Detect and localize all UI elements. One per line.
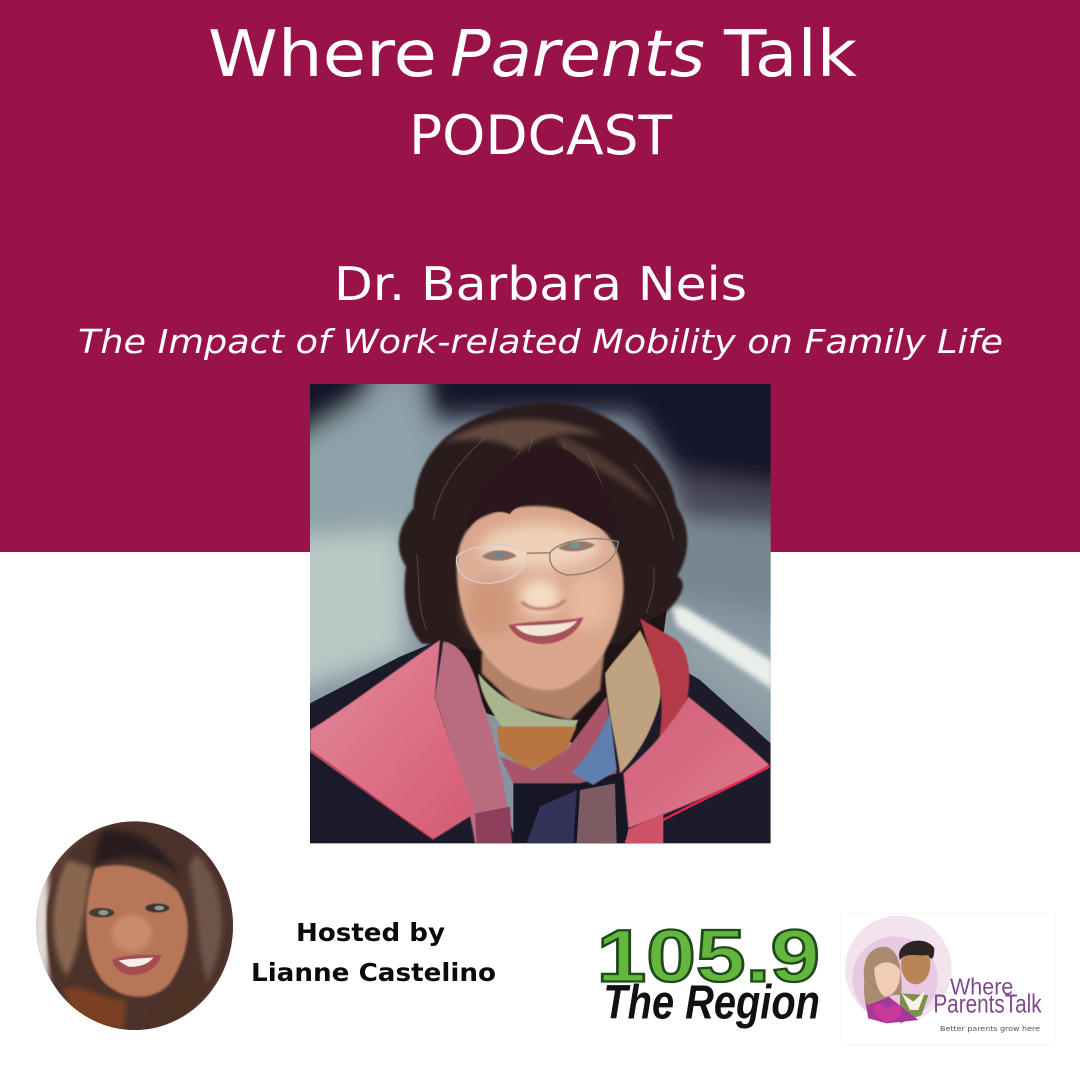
subtitle: podcast: PODCAST bbox=[409, 104, 673, 167]
host hair bbox=[47, 822, 234, 1033]
maroon header band bbox=[0, 0, 1080, 552]
episode title: The Impact of Work-related Mobility on Family Life bbox=[78, 322, 1003, 361]
host mouth bbox=[112, 955, 162, 975]
logo wordmark: Where bbox=[950, 973, 1013, 999]
title bbox=[208, 18, 857, 92]
man figure bbox=[900, 993, 928, 1023]
logo: Where Parents Talk: ParentsTalk bbox=[933, 988, 1042, 1018]
nose and smile bbox=[522, 600, 565, 609]
guest name: Dr. Barbara Neis bbox=[334, 257, 747, 311]
face bbox=[457, 506, 623, 690]
fringe over forehead bbox=[467, 447, 617, 537]
hosted by label: Hosted by bbox=[296, 918, 445, 947]
hosted by label bbox=[251, 918, 496, 987]
logo: Where Parents Talk bbox=[840, 913, 1056, 1045]
woman figure bbox=[865, 995, 918, 1023]
dark base behind neck bbox=[440, 610, 667, 747]
scarf right band and collar bbox=[605, 630, 661, 773]
logo circles bbox=[845, 916, 952, 1022]
host portrait photo bbox=[36, 821, 233, 1030]
hair bbox=[399, 403, 687, 650]
title: Talk bbox=[723, 18, 857, 92]
logo: 105.9 The Region: 105.9 bbox=[597, 915, 820, 998]
scarf neck wrap bbox=[478, 673, 579, 728]
logo: Where Parents Talk: Better parents grow here bbox=[940, 1024, 1041, 1033]
guest portrait photo bbox=[310, 384, 771, 844]
jacket dark shoulders and bottom bbox=[310, 640, 517, 843]
title: Parents bbox=[450, 18, 705, 92]
title: Where bbox=[208, 18, 437, 92]
eyes and glasses bbox=[482, 550, 517, 561]
jacket pink left panel bbox=[310, 640, 475, 839]
logo: 105.9 The Region: The Region bbox=[603, 975, 820, 1029]
host eyes bbox=[89, 908, 114, 917]
hair strands bbox=[417, 437, 673, 630]
road stripe bbox=[672, 607, 773, 690]
jacket pink right panel bbox=[623, 697, 769, 828]
scarf long left band bbox=[435, 642, 512, 843]
neck bbox=[482, 647, 605, 720]
logo: 105.9 The Region bbox=[597, 915, 820, 1029]
host face bbox=[86, 865, 188, 997]
hosted by label: Lianne Castelino bbox=[251, 958, 496, 987]
